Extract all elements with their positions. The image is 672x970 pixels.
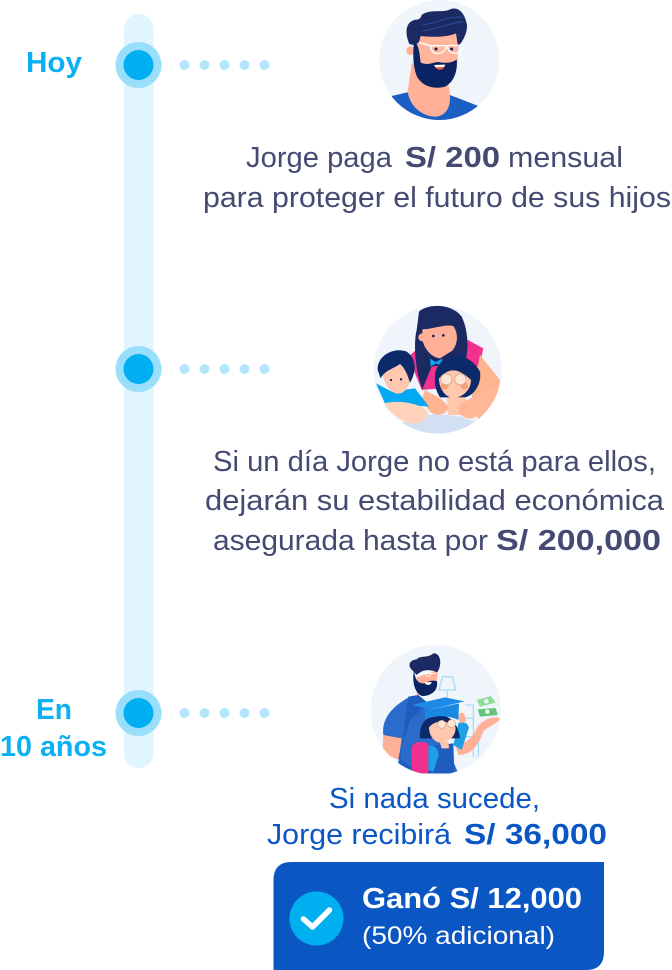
timeline marker: en 10 años — [116, 690, 162, 736]
timeline track — [124, 14, 154, 768]
label: En 10 años — [0, 694, 107, 763]
text: Jorge paga: Jorge paga — [246, 142, 393, 174]
text: Jorge recibirá: S/ 36,000 — [464, 819, 607, 851]
text: Jorge recibirá — [267, 819, 607, 851]
text: Si nada sucede: Si nada sucede, — [329, 783, 540, 815]
dotted connector: hoy — [180, 60, 270, 70]
label: En 10 años: En — [36, 694, 72, 726]
callout: ganancia — [274, 862, 604, 970]
text: adicional: (50% adicional) — [362, 922, 555, 950]
text: Jorge paga: mensual — [508, 142, 623, 174]
text: Jorge paga — [246, 142, 623, 174]
text: para proteger: para proteger el futuro de sus hijos — [203, 182, 671, 214]
dotted connector: en 10 años — [180, 708, 270, 718]
text: asegurada — [213, 525, 661, 557]
illustration: Jorge portrait — [379, 0, 499, 123]
dotted connector: middle — [180, 364, 270, 374]
icon: check — [290, 892, 344, 946]
text: Si un día: Si un día Jorge no está para ellos, — [213, 446, 656, 478]
text: Jorge paga: S/ 200 — [405, 142, 500, 174]
text: Jorge recibirá: Jorge recibirá — [267, 819, 452, 851]
text: asegurada: S/ 200,000 — [496, 525, 661, 557]
timeline marker: middle — [116, 346, 162, 392]
text: asegurada: asegurada hasta por — [213, 525, 488, 557]
label: En 10 años: 10 años — [0, 731, 107, 763]
timeline marker: hoy — [116, 42, 162, 88]
text: dejarán: dejarán su estabilidad económica — [205, 485, 665, 517]
illustration: family — [374, 306, 502, 437]
label: Hoy: Hoy — [26, 47, 82, 79]
text: Ganó: Ganó S/ 12,000 — [362, 883, 582, 915]
illustration: father and graduate daughter — [371, 645, 501, 775]
